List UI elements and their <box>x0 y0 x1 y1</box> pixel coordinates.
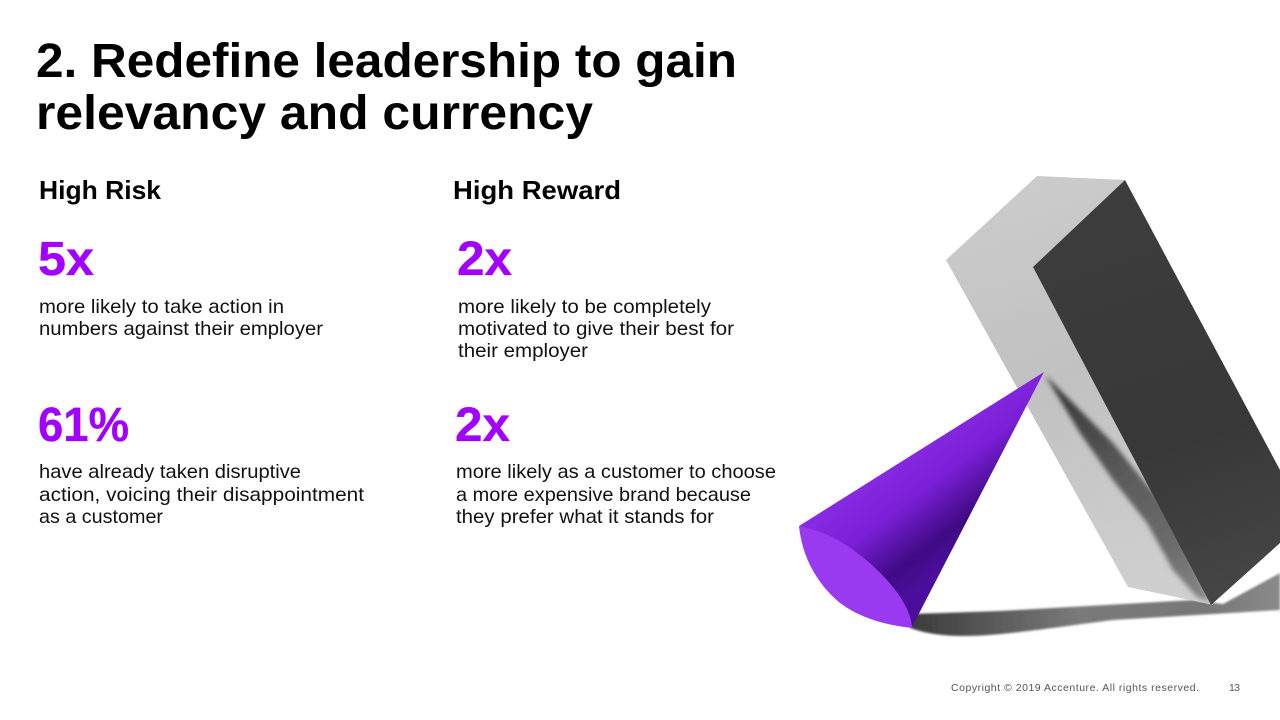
stat: 2x customer: 2x <box>455 399 510 452</box>
block inner cast shadow <box>1045 375 1210 602</box>
stat: 2x motivated: more likely to be completely <box>458 296 711 318</box>
stat: 5x: more likely to take action in <box>39 296 284 318</box>
stat: 2x motivated: motivated to give their best for <box>458 318 735 340</box>
floor shadow <box>910 573 1280 636</box>
copyright: Copyright © 2019 Accenture. All rights reserved. <box>951 682 1199 694</box>
block dark face <box>1033 180 1280 605</box>
stat: 2x motivated: 2x <box>457 233 512 286</box>
stat: 2x motivated <box>457 233 735 362</box>
heading: high risk: High Risk <box>39 175 162 205</box>
stat: 5x <box>38 233 324 340</box>
stat: 2x customer: they prefer what it stands for <box>456 506 715 528</box>
stat: 61%: as a customer <box>39 506 164 528</box>
stat: 2x customer: a more expensive brand because <box>456 484 751 506</box>
title <box>36 35 737 140</box>
page number: 13 <box>1229 682 1240 694</box>
title: 2. Redefine leadership to gain <box>36 35 737 88</box>
footer <box>951 682 1240 694</box>
title: relevancy and currency <box>36 87 593 140</box>
stat: 61%: have already taken disruptive <box>39 461 301 483</box>
cone body <box>799 372 1044 627</box>
stat: 61%: action, voicing their disappointment <box>39 484 365 506</box>
stat: 2x customer <box>455 399 776 528</box>
stat: 2x customer: more likely as a customer to choose <box>456 461 776 483</box>
heading: high reward: High Reward <box>453 175 621 205</box>
cone base <box>799 526 912 628</box>
stat: 61% <box>38 399 365 528</box>
stat: 61%: 61% <box>38 399 129 452</box>
stat: 2x motivated: their employer <box>458 340 589 362</box>
stat: 5x: numbers against their employer <box>39 318 324 340</box>
panel: high risk <box>38 175 365 528</box>
block light face <box>946 176 1213 605</box>
stat: 5x: 5x <box>38 233 94 286</box>
panel: high reward <box>453 175 776 528</box>
illustration: purple cone leaning on grey block <box>799 176 1280 636</box>
